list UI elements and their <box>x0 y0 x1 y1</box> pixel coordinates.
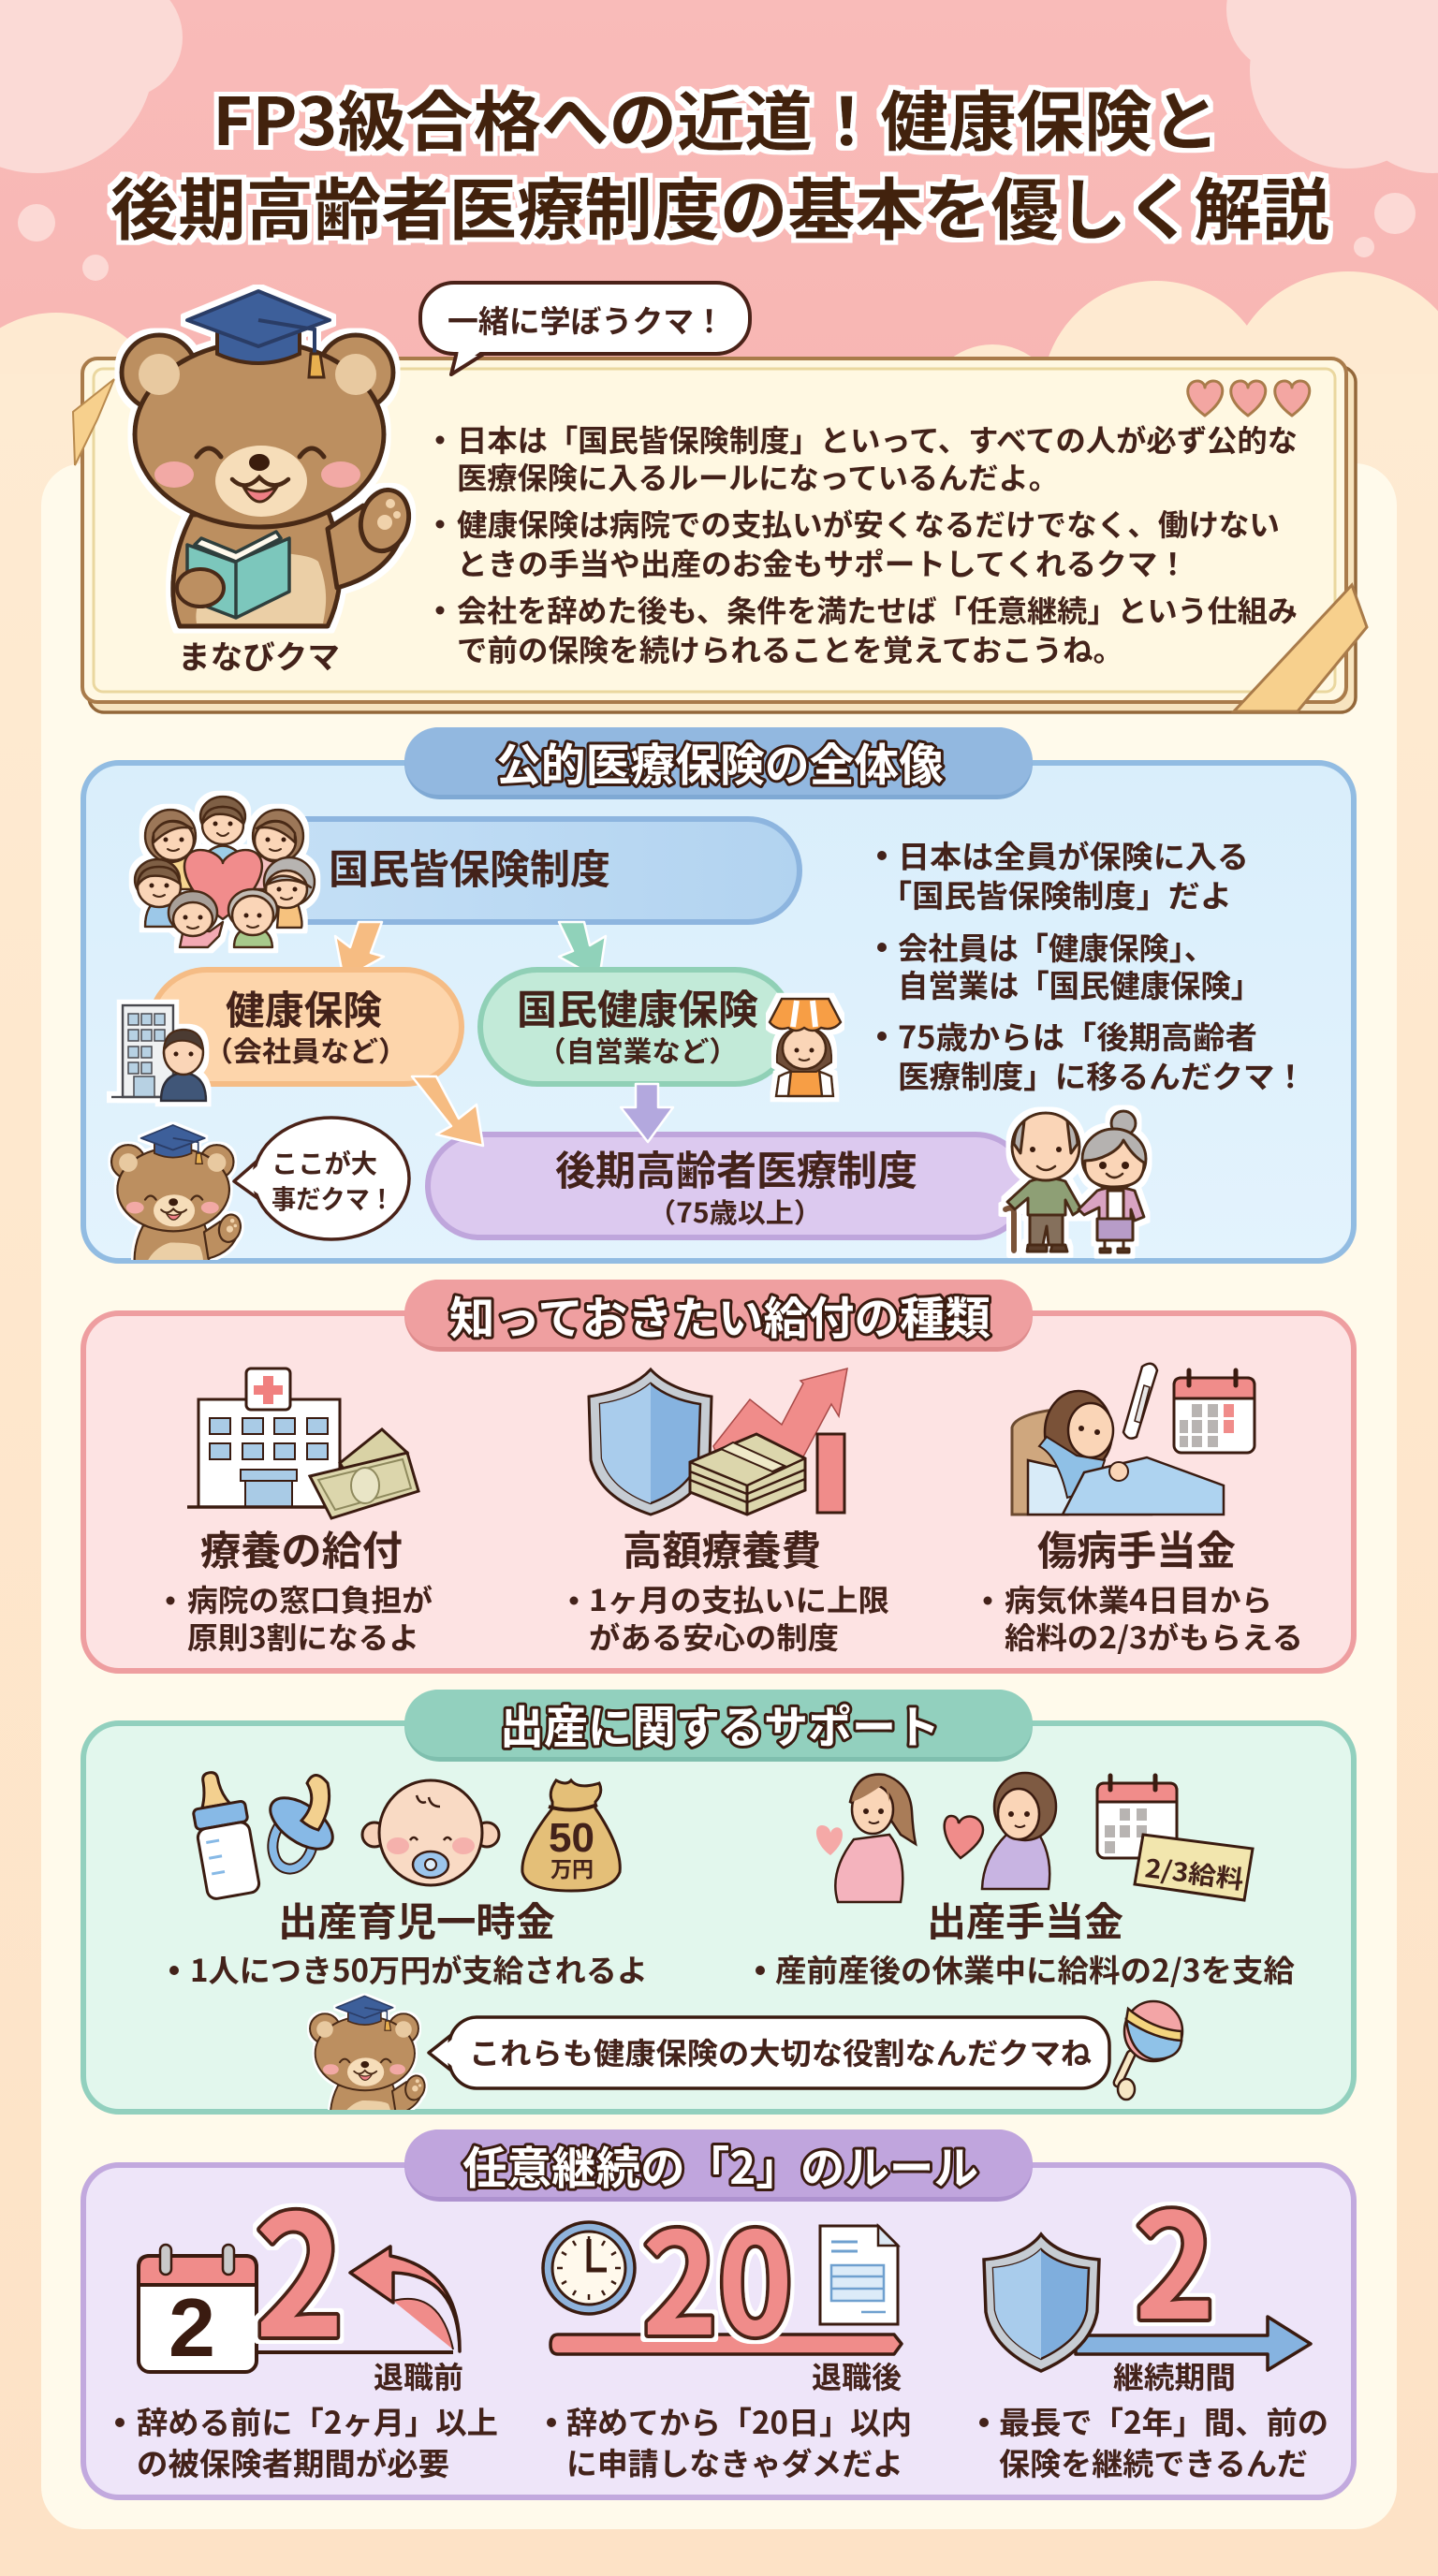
node: 国民健康保険: （自営業など） <box>537 1029 738 1070</box>
person: woman top left <box>145 810 196 862</box>
node: 国民皆保険制度 <box>251 819 800 922</box>
icon: calendar 2: 2 <box>169 2281 215 2374</box>
node: 健康保険: （会社員など） <box>204 1029 407 1070</box>
panel: 公的医療保険の全体像 <box>83 727 1354 1276</box>
icon: baby face <box>362 1780 499 1885</box>
rule: 継続期間 2年: 保険を継続できるんだ <box>999 2439 1308 2484</box>
person: man left <box>135 859 181 907</box>
benefit: 傷病手当金: 給料の2/3がもらえる <box>1005 1615 1303 1658</box>
rule: 退職前 2ヶ月: 辞める前に「2ヶ月」以上 <box>137 2398 498 2443</box>
big number 2: 2 <box>1135 2150 1215 2361</box>
mascot: graduate bear with book <box>122 291 416 626</box>
speech bubble: 一緒に学ぼうクマ: 一緒に学ぼうクマ！ <box>448 297 725 342</box>
person: grandma bottom left <box>169 891 217 936</box>
node: 国民健康保険 <box>480 970 792 1084</box>
mascot: small bear <box>111 1125 243 1276</box>
benefit: 療養の給付: 病院の窓口負担が <box>187 1577 433 1620</box>
icon: calendar with 2/3給料 tag <box>1097 1776 1253 1900</box>
benefit: 傷病手当金 <box>983 1519 1303 1658</box>
rule: 継続期間 2年: 最長で「2年」間、前の <box>999 2398 1328 2443</box>
icon: baby rattle <box>1118 2001 1182 2100</box>
big number 20: 20 <box>642 2173 793 2376</box>
heading pill: 出産に関するサポート <box>500 1690 940 1756</box>
title <box>110 70 1329 254</box>
node: 後期高齢者医療制度: （75歳以上） <box>648 1192 822 1231</box>
rule: 退職前 2ヶ月: の被保険者期間が必要 <box>137 2439 449 2484</box>
heading pill: 任意継続の「2」のルール <box>462 2131 978 2197</box>
bullet text: overview: 75歳からは「後期高齢者 <box>898 1013 1257 1058</box>
person: woman top right <box>253 810 303 862</box>
arrow: 皆保険 to 国民健康保険 <box>559 922 606 979</box>
icon: shield <box>984 2234 1099 2371</box>
heading pill <box>404 727 1033 799</box>
person: boy top <box>200 797 245 844</box>
benefit: 出産手当金: 出産手当金 <box>927 1891 1123 1948</box>
icon: hospital and money <box>187 1368 418 1518</box>
benefit: 療養の給付: 原則3割になるよ <box>187 1615 419 1658</box>
rule: 継続期間 2年: 継続期間 <box>1113 2354 1236 2397</box>
bar arrow <box>550 2334 902 2354</box>
node: 後期高齢者医療制度 <box>428 1134 1027 1237</box>
icon: office building and worker <box>111 1005 206 1101</box>
node: 国民皆保険制度: 国民皆保険制度 <box>329 838 610 896</box>
node: 健康保険: 健康保険 <box>226 979 382 1036</box>
arrow: 健康保険 to 後期高齢者 <box>412 1076 483 1146</box>
benefit: 療養の給付 <box>167 1519 433 1658</box>
benefit: 出産手当金: 産前産後の休業中に給料の2/3を支給 <box>775 1946 1295 1991</box>
title: FP3級合格への近道！健康保険と <box>213 70 1220 165</box>
benefit: 出産育児一時金: 出産育児一時金 <box>278 1891 555 1948</box>
speech bubble: 一緒に学ぼうクマ <box>420 283 750 374</box>
person: grey woman right <box>264 857 315 908</box>
benefit: 療養の給付: 療養の給付 <box>200 1519 403 1577</box>
open book <box>187 532 289 618</box>
hearts <box>1188 381 1310 416</box>
icon: money bag 50万円: 万円 <box>550 1852 594 1883</box>
bullet text: overview: 会社員は「健康保険」、 <box>898 924 1214 969</box>
icon: family with heart <box>135 797 315 947</box>
rule: 退職前 2ヶ月: 退職前 <box>374 2354 463 2397</box>
heading pill: 公的医療保険の全体像 <box>496 728 944 794</box>
node: 国民健康保険: 国民健康保険 <box>517 978 758 1036</box>
speech bubble: ここが大事だクマ <box>234 1118 409 1239</box>
mascot: small bear <box>307 1994 428 2110</box>
icon: shield, arrow and money stack <box>589 1368 847 1515</box>
speech bubble: ここが大事だクマ: ここが大 <box>271 1144 377 1181</box>
benefit: 高額療養費: がある安心の制度 <box>589 1615 839 1658</box>
node: 後期高齢者医療制度: 後期高齢者医療制度 <box>555 1139 917 1197</box>
intro text: 健康保険は病院での支払いが安くなるだけでなく、働けない <box>457 502 1280 545</box>
floating bubbles <box>18 193 1416 281</box>
arrow: 皆保険 to 健康保険 <box>335 922 384 979</box>
icon: baby bottle <box>187 1767 260 1900</box>
intro text: 日本は「国民皆保険制度」といって、すべての人が必ず公的な <box>457 417 1298 461</box>
ribbon left <box>73 379 114 465</box>
bullet text: overview: 「国民皆保険制度」だよ <box>880 871 1232 916</box>
ribbon right <box>1234 585 1367 711</box>
panel: intro card <box>73 359 1367 712</box>
icon: pregnant women with hearts <box>816 1773 1056 1902</box>
heading pill: 知っておきたい給付の種類 <box>449 1281 990 1347</box>
benefit: 高額療養費 <box>569 1519 889 1658</box>
benefit: 傷病手当金: 傷病手当金 <box>1037 1519 1236 1577</box>
intro text: で前の保険を続けられることを覚えておこうね。 <box>457 627 1123 670</box>
icon: document <box>820 2226 898 2324</box>
blue arrow <box>1076 2317 1311 2370</box>
intro text: 会社を辞めた後も、条件を満たせば「任意継続」という仕組み <box>457 588 1298 631</box>
rule: 継続期間 2年 <box>979 2150 1328 2484</box>
arrow: 国民健康保険 to 後期高齢者 <box>621 1084 673 1142</box>
bullet text: overview: 日本は全員が保険に入る <box>898 832 1249 877</box>
icon: elderly couple <box>1005 1111 1146 1252</box>
node: 健康保険 <box>150 970 462 1084</box>
top left cloud <box>0 0 183 173</box>
benefit: 出産手当金 <box>756 1891 1295 1991</box>
big number 2: 2 <box>255 2144 345 2385</box>
bullet text: overview <box>877 832 1306 1097</box>
icon: clock <box>543 2222 635 2314</box>
title: 後期高齢者医療制度の基本を優しく解説 <box>110 155 1329 254</box>
rule: 退職後 20日: に申請しなきゃダメだよ <box>566 2439 903 2484</box>
icon: sick person in bed with thermometer and calendar <box>1012 1364 1255 1515</box>
intro text: 医療保険に入るルールになっているんだよ。 <box>457 455 1059 498</box>
intro text: ときの手当や出産のお金もサポートしてくれるクマ！ <box>457 541 1188 584</box>
rule: 退職前 2ヶ月 <box>115 2144 498 2484</box>
benefit: 高額療養費: 高額療養費 <box>623 1519 821 1577</box>
bullet text: overview: 医療制度」に移るんだクマ！ <box>898 1052 1306 1097</box>
benefit: 出産育児一時金: 1人につき50万円が支給されるよ <box>190 1946 648 1991</box>
rule: 退職後 20日: 辞めてから「20日」以内 <box>566 2398 912 2443</box>
benefit: 傷病手当金: 病気休業4日目から <box>1005 1577 1272 1620</box>
panel: 任意継続の「2」のルール <box>83 2130 1354 2497</box>
speech bubble: ここが大事だクマ: 事だクマ！ <box>271 1179 394 1217</box>
top right cloud <box>1226 0 1438 173</box>
rule: 退職後 20日 <box>543 2173 912 2484</box>
icon: shop keeper <box>770 999 841 1096</box>
heading pill <box>404 1690 1033 1762</box>
icon: pacifier <box>261 1775 342 1873</box>
mascot name label: まなびクマ <box>178 632 340 678</box>
speech bubble: これらも健康保険の大切な役割なんだクマね: これらも健康保険の大切な役割なんだクマね <box>469 2030 1092 2073</box>
speech bubble: これらも健康保険の大切な役割なんだクマね <box>429 2017 1109 2088</box>
line and curved arrow <box>253 2247 460 2352</box>
intro text <box>436 417 1298 670</box>
benefit: 出産育児一時金 <box>169 1891 648 1991</box>
icon: money bag 50万円: 50 <box>549 1815 594 1861</box>
panel: 知っておきたい給付の種類 <box>83 1280 1354 1671</box>
person: grandpa bottom right <box>228 889 277 935</box>
panel: 出産に関するサポート <box>83 1690 1354 2130</box>
icon: calendar with 2/3給料 tag: 2/3給料 <box>1143 1848 1246 1896</box>
icon: money bag 50万円 <box>522 1780 620 1891</box>
cream main panel <box>41 463 1397 2529</box>
bullet text: overview: 自営業は「国民健康保険」 <box>898 961 1261 1006</box>
rule: 退職後 20日: 退職後 <box>812 2354 902 2397</box>
icon: calendar 2 <box>139 2245 257 2374</box>
benefit: 高額療養費: 1ヶ月の支払いに上限 <box>589 1577 889 1620</box>
